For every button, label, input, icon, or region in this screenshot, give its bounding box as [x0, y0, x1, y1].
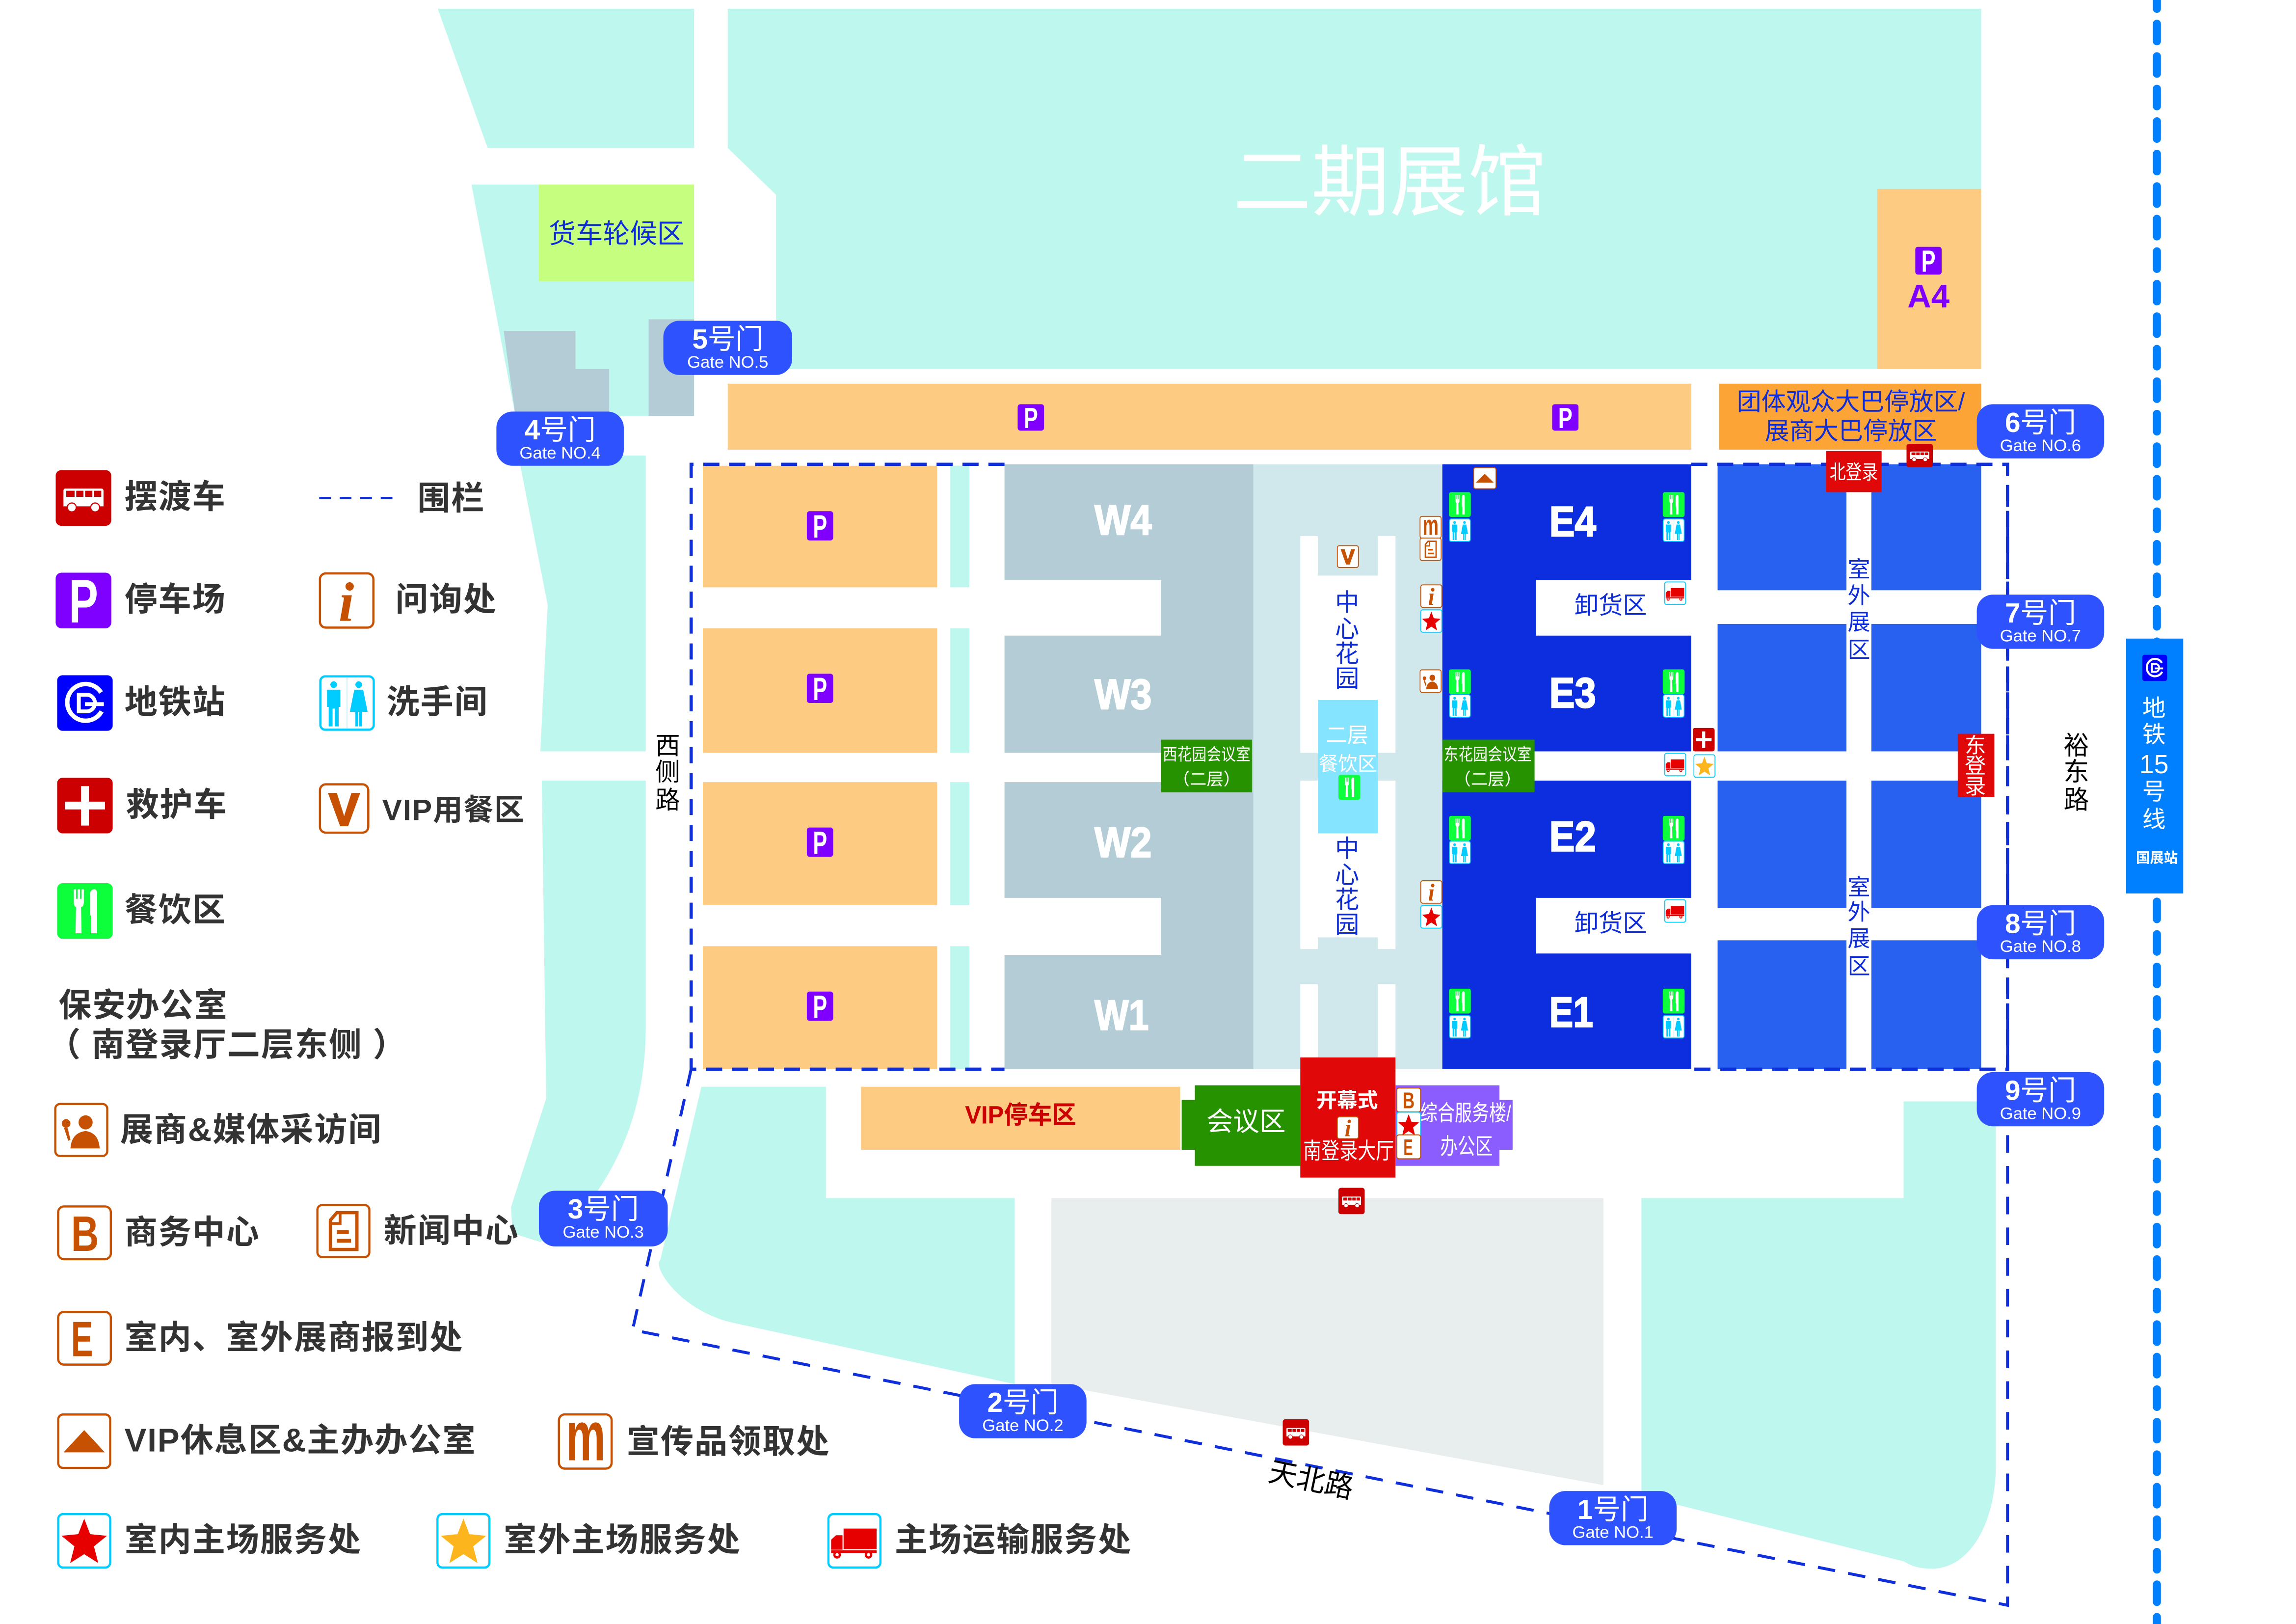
legend: metro: 地铁站 [125, 684, 226, 721]
gate 7: Gate NO.7 [2000, 627, 2081, 646]
icon: parking: P [1024, 402, 1038, 434]
parking strip north [728, 384, 1691, 450]
fence: east [1691, 464, 2007, 1069]
west halls [1005, 464, 1254, 1069]
west garden meeting room: （二层） [1173, 770, 1240, 789]
legend: information [320, 571, 497, 633]
east registration: 录 [1965, 775, 1986, 799]
icon: VIP dining [1337, 545, 1359, 568]
icons: E1 east amenities [1663, 989, 1684, 1038]
legend: outdoor service [437, 1514, 741, 1568]
legend: business centre [58, 1206, 260, 1262]
gate 5: 5号门 [692, 324, 763, 355]
icon: info: i [1428, 583, 1435, 610]
meeting area [1182, 1085, 1300, 1166]
icon: indoor service [1421, 906, 1442, 928]
legend: toilets [320, 677, 488, 730]
gate 4: Gate NO.4 [519, 444, 601, 462]
metro line 15 panel: 国展站 [2136, 850, 2178, 866]
icon: souvenir: m [1423, 510, 1439, 541]
icon: parking: P [813, 989, 827, 1025]
label: unloading area south: 卸货区 [1575, 910, 1647, 937]
icon: business centre [1397, 1087, 1420, 1113]
fence: south loop [633, 464, 2007, 1605]
legend: business centre: 商务中心 [125, 1214, 260, 1251]
metro line [2156, 0, 2158, 1624]
legend: souvenirs: 宣传品领取处 [627, 1424, 830, 1461]
label: outdoor area upper: 室 [1847, 556, 1870, 582]
legend: media room [55, 1104, 382, 1156]
legend: information: 问询处 [396, 581, 497, 618]
north registration: 北登录 [1830, 461, 1878, 484]
gate 3: Gate NO.3 [562, 1223, 644, 1242]
icon: info: i [1428, 879, 1435, 906]
label: outdoor area upper: 展 [1847, 609, 1870, 635]
legend: dining: 餐饮区 [125, 892, 226, 929]
metro line 15 panel [2126, 639, 2183, 893]
road label: West side: 西 [655, 731, 680, 759]
lawn: south east [1641, 1102, 1996, 1569]
road label: Yudong: 路 [2063, 786, 2089, 814]
icon: VIP dining: V [1341, 545, 1355, 568]
title: phase two hall: 二期展馆 [1233, 139, 1546, 226]
icon: parking: P [813, 671, 827, 707]
gate 6: Gate NO.6 [2000, 436, 2081, 455]
legend: parking: P [69, 567, 98, 636]
legend: registration: E [71, 1312, 93, 1367]
legend: VIP dining [320, 784, 525, 835]
second floor dining: 餐饮区 [1319, 753, 1377, 775]
label: outdoor area upper: 区 [1847, 637, 1870, 663]
icon: info [1421, 879, 1442, 906]
gate 4 [496, 411, 624, 466]
icon: ambulance [1693, 728, 1715, 751]
south registration hall: 南登录大厅 [1303, 1138, 1394, 1164]
south registration hall: 开幕式 [1316, 1088, 1378, 1111]
gate 1 [1549, 1491, 1677, 1545]
east garden meeting room: （二层） [1454, 770, 1522, 789]
icons: E4 west amenities [1449, 492, 1471, 541]
legend: shuttle [55, 470, 226, 526]
legend: transport service: 主场运输服务处 [895, 1521, 1132, 1558]
parking A4: A4 [1907, 278, 1949, 315]
gate 5 [663, 321, 792, 375]
bus parking: 展商大巴停放区 [1765, 417, 1937, 445]
label: central garden lower: 中 [1335, 835, 1359, 862]
office building [1395, 1085, 1513, 1166]
gate 7: 7号门 [2005, 598, 2076, 629]
central garden south [1300, 781, 1395, 949]
legend: security office: （ 南登录厅二层东侧 ） [48, 1027, 407, 1063]
icons: E2 west amenities [1449, 816, 1471, 864]
west car parks [703, 466, 937, 1069]
legend: souvenirs: m [566, 1397, 606, 1475]
label: central garden upper: 心 [1335, 616, 1359, 643]
grey building north west [504, 331, 609, 416]
gate 6 [1977, 404, 2104, 459]
label: outdoor area upper: 外 [1847, 583, 1870, 608]
label: central garden lower: 心 [1335, 862, 1359, 889]
second floor dining [1318, 700, 1378, 834]
icon: registration [1397, 1135, 1420, 1160]
road label: Yudong: 东 [2063, 758, 2089, 786]
icon: dining [1338, 775, 1361, 800]
lawn: phase two site [728, 9, 1981, 369]
lawn: west lower [511, 781, 646, 1242]
plaza: south forecourt [1051, 1198, 1603, 1485]
icon: parking: P [813, 825, 827, 861]
icon: outdoor service [1694, 755, 1715, 777]
west garden meeting room [1161, 740, 1252, 792]
metro line 15 panel: 线 [2142, 807, 2165, 833]
legend: parking: 停车场 [125, 581, 226, 618]
gate 2: 2号门 [987, 1387, 1058, 1418]
label: outdoor area lower: 展 [1847, 925, 1870, 951]
gate 2: Gate NO.2 [982, 1416, 1064, 1435]
gate 7 [1977, 595, 2104, 649]
metro line 15 panel: 铁 [2142, 722, 2165, 748]
legend [48, 470, 1132, 1568]
icon: souvenir [1420, 510, 1441, 541]
lawn: top left [438, 9, 694, 148]
gate 1: 1号门 [1577, 1494, 1649, 1525]
second floor dining: 二层 [1326, 724, 1368, 748]
hall W2: W2 [1095, 819, 1151, 866]
legend: information: i [339, 571, 354, 633]
gate 6: 6号门 [2005, 407, 2076, 438]
icon: metro [2142, 655, 2167, 681]
icons: E4 east amenities [1663, 492, 1684, 541]
hall E4: E4 [1549, 498, 1596, 545]
legend: VIP lounge: VIP休息区&主办办公室 [125, 1422, 476, 1459]
legend: press centre [318, 1205, 519, 1257]
label: outdoor area lower: 区 [1847, 953, 1870, 979]
gate 9: Gate NO.9 [2000, 1104, 2081, 1123]
east garden meeting room [1442, 740, 1535, 792]
icons: E1 west amenities [1449, 989, 1471, 1038]
icon: parking: P [1922, 244, 1936, 278]
gate 5: Gate NO.5 [687, 353, 768, 372]
legend: indoor service: 室内主场服务处 [125, 1521, 362, 1558]
label: central garden upper: 中 [1335, 589, 1359, 616]
gate 2 [959, 1384, 1087, 1438]
legend: indoor service [58, 1514, 362, 1568]
north registration [1826, 451, 1882, 492]
legend: transport service [828, 1514, 1132, 1568]
label: central garden upper: 花 [1335, 640, 1359, 667]
east halls [1442, 464, 1691, 1069]
east registration [1958, 734, 1994, 799]
VIP parking [861, 1087, 1180, 1150]
metro line 15 panel: 号 [2142, 779, 2165, 805]
legend: registration: 室内、室外展商报到处 [125, 1320, 463, 1356]
label: outdoor area lower: 室 [1847, 874, 1870, 900]
icon: registration: E [1403, 1135, 1413, 1160]
label: outdoor area lower: 外 [1847, 899, 1870, 925]
road label: West side: 路 [655, 786, 680, 814]
icon: shuttle south road [1282, 1419, 1309, 1446]
central garden north [1300, 536, 1395, 753]
legend: business centre: B [71, 1206, 99, 1262]
legend: VIP dining: VIP用餐区 [382, 793, 525, 827]
gate 9: 9号门 [2005, 1076, 2076, 1107]
lawn: west upper [518, 456, 646, 751]
legend: parking [55, 567, 226, 636]
hall W1: W1 [1095, 992, 1148, 1039]
legend: souvenirs [559, 1397, 830, 1475]
metro line 15 panel: 15 [2139, 750, 2168, 779]
road label: Tianbei: 天北路 [1266, 1456, 1356, 1505]
icon: business centre: B [1403, 1087, 1415, 1113]
central concourse [1254, 464, 1442, 1069]
hall E1: E1 [1549, 989, 1593, 1036]
gate 9 [1977, 1072, 2104, 1126]
legend: VIP dining: V [329, 784, 359, 835]
lawn: north west block [472, 185, 694, 416]
hall W4: W4 [1095, 497, 1151, 544]
icon: info [1421, 583, 1442, 610]
road label: Yudong: 裕 [2063, 731, 2089, 760]
icon: indoor service [1421, 610, 1442, 632]
east garden meeting room: 东花园会议室 [1444, 745, 1532, 764]
green strips [950, 466, 969, 1069]
office building: 办公区 [1440, 1134, 1493, 1159]
gate 8: Gate NO.8 [2000, 937, 2081, 956]
metro line 15 panel: 地 [2142, 696, 2165, 722]
legend: toilets: 洗手间 [387, 684, 488, 721]
east registration: 登 [1965, 755, 1986, 778]
icon: shuttle south hall [1338, 1188, 1365, 1214]
lawn: south west [659, 1087, 1015, 1384]
truck waiting area: 货车轮候区 [549, 218, 684, 249]
icon: truck north [1665, 582, 1686, 604]
gate 8: 8号门 [2005, 908, 2076, 939]
icon: VIP lounge [1473, 468, 1496, 489]
legend: outdoor service: 室外主场服务处 [504, 1521, 741, 1558]
hall E3: E3 [1549, 670, 1596, 717]
icon: info [1337, 1115, 1359, 1142]
icons: E2 east amenities [1663, 816, 1684, 864]
meeting area: 会议区 [1206, 1107, 1285, 1137]
legend: registration [58, 1312, 463, 1367]
legend: VIP lounge [58, 1414, 476, 1468]
VIP parking: VIP停车区 [965, 1101, 1076, 1129]
fence: west and top [691, 464, 1005, 1069]
garden strips [1300, 984, 1395, 1057]
legend: security office [48, 987, 407, 1063]
legend: dining [57, 883, 226, 939]
icon: indoor service [1397, 1112, 1420, 1137]
gate 3 [539, 1191, 667, 1246]
grey building near gate 5 [649, 319, 694, 416]
icon: media room [1420, 670, 1441, 692]
gate 4: 4号门 [525, 415, 596, 446]
legend: shuttle: 摆渡车 [125, 479, 226, 515]
icons: E3 west amenities [1449, 669, 1471, 717]
label: central garden lower: 花 [1335, 887, 1359, 914]
gate 1: Gate NO.1 [1573, 1523, 1654, 1542]
icon: parking: P [813, 509, 827, 545]
label: central garden lower: 园 [1335, 911, 1359, 938]
legend: media room: 展商&媒体采访间 [120, 1111, 382, 1148]
icon: truck south [1665, 900, 1686, 922]
east registration: 东 [1965, 734, 1986, 758]
icons: E3 east amenities [1663, 669, 1684, 717]
icon: press centre [1420, 538, 1441, 561]
bus parking: 团体观众大巴停放区/ [1737, 388, 1965, 415]
west garden meeting room: 西花园会议室 [1163, 745, 1251, 764]
hall W3: W3 [1095, 671, 1151, 718]
outdoor exhibition blocks [1718, 464, 1981, 1069]
gate 3: 3号门 [568, 1194, 639, 1225]
legend: fence: 围栏 [417, 480, 485, 517]
office building: 综合服务楼/ [1420, 1101, 1511, 1125]
icon: parking: P [1558, 402, 1573, 434]
truck waiting area [539, 185, 694, 281]
legend: ambulance [57, 778, 228, 834]
icon: shuttle north [1906, 444, 1933, 467]
road label: West side: 侧 [655, 758, 680, 786]
parking A4 [1877, 189, 1981, 369]
icon: truck centre [1665, 753, 1686, 776]
icon: info: i [1345, 1115, 1351, 1142]
south registration hall [1300, 1057, 1395, 1178]
legend: metro [57, 675, 226, 731]
bus parking [1719, 384, 1981, 450]
hall E2: E2 [1549, 813, 1596, 860]
label: central garden upper: 园 [1335, 665, 1359, 692]
legend: press centre: 新闻中心 [384, 1213, 519, 1249]
label: unloading area north: 卸货区 [1575, 592, 1647, 619]
gate 8 [1977, 905, 2104, 959]
legend: security office: 保安办公室 [58, 987, 228, 1024]
legend: ambulance: 救护车 [126, 786, 228, 823]
